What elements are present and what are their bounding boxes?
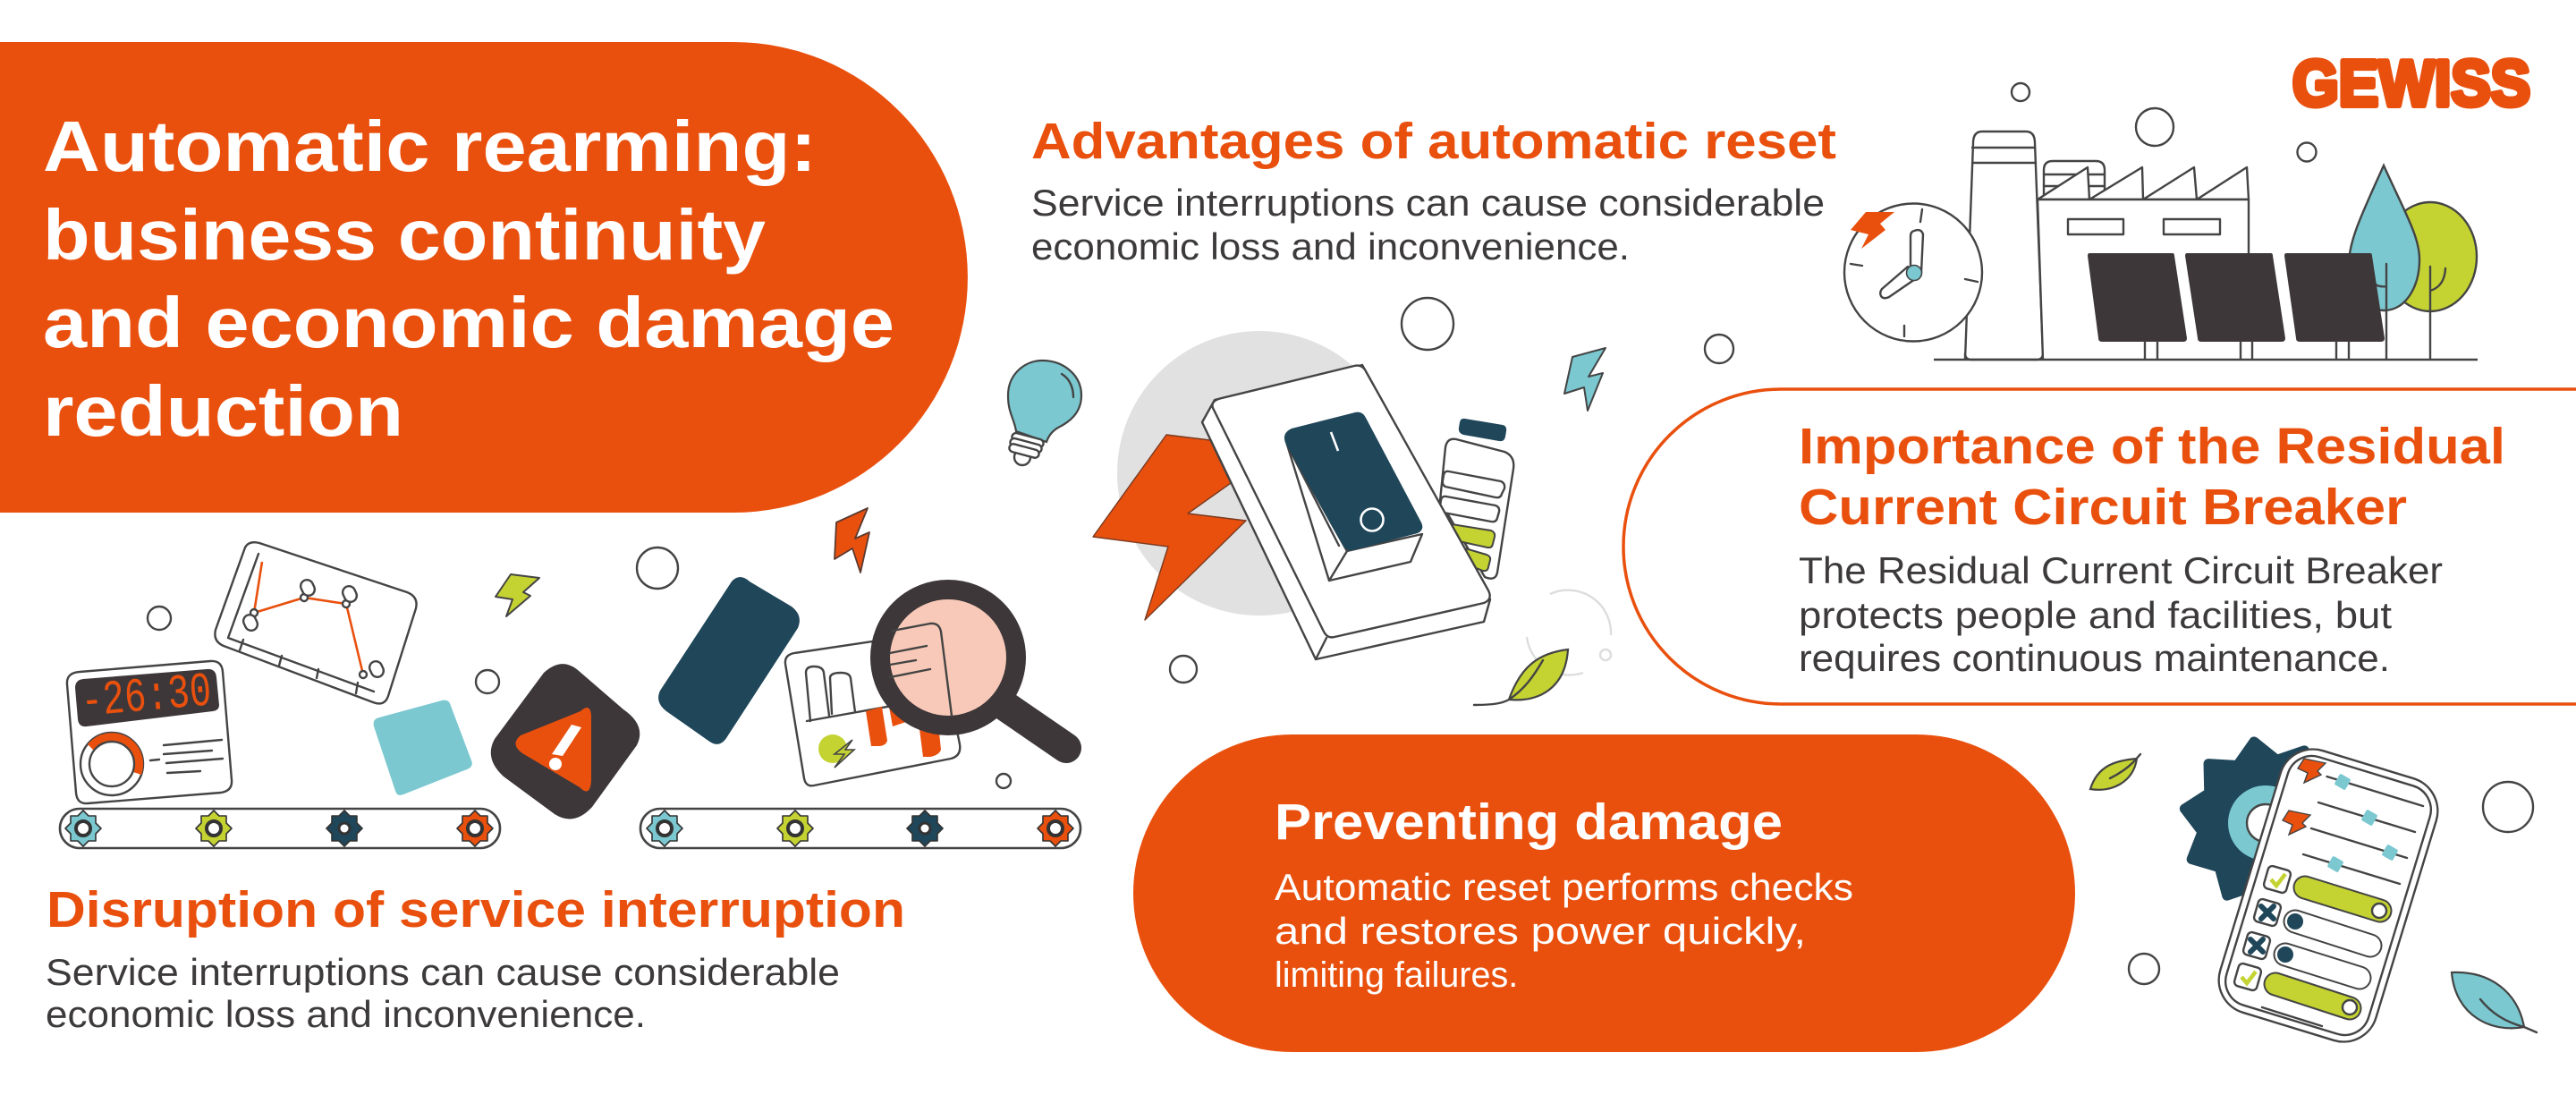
icon: teal bolt bbox=[1564, 348, 1606, 411]
icon: phone with controls bbox=[2210, 741, 2446, 1050]
text block: disruption of service interruption bbox=[46, 881, 905, 1035]
logo: GEWISS: GEWISS bbox=[2292, 48, 2530, 120]
panel: title bbox=[0, 42, 968, 513]
icon: magnifier bbox=[880, 590, 1066, 748]
title: Automatic rearming: bbox=[43, 106, 817, 186]
title bbox=[43, 106, 894, 451]
icon: switch with lightning and battery bbox=[1093, 331, 1513, 659]
panel: importance of the residual current circuit breaker: requires continuous maintenance. bbox=[1799, 637, 2390, 679]
text block: disruption of service interruption: economic loss and inconvenience. bbox=[46, 993, 646, 1035]
icon: lime bolt bbox=[496, 574, 539, 616]
panel: preventing damage bbox=[1133, 734, 2075, 1052]
text block: advantages of automatic reset: Advantages of automatic reset bbox=[1031, 113, 1836, 170]
switch plate bbox=[1202, 365, 1490, 659]
trees bbox=[2384, 202, 2477, 311]
solar panels bbox=[2088, 253, 2187, 342]
panel: preventing damage: Automatic reset performs checks bbox=[1275, 866, 1853, 908]
battery bbox=[1440, 419, 1513, 579]
text block: disruption of service interruption: Disruption of service interruption bbox=[47, 881, 905, 938]
text block: advantages of automatic reset: economic loss and inconvenience. bbox=[1031, 225, 1630, 267]
panel: preventing damage: limiting failures. bbox=[1275, 955, 1518, 995]
toggles bbox=[2275, 887, 2380, 1008]
icon: lime leaf bbox=[1474, 649, 1568, 705]
title: business continuity bbox=[43, 195, 767, 275]
icon: orange bolt bbox=[835, 508, 869, 573]
icon: timer device bbox=[67, 661, 232, 803]
decorative gray ring bbox=[1527, 590, 1611, 675]
text block: advantages of automatic reset: Service interruptions can cause considerable bbox=[1031, 182, 1825, 224]
icon: report under magnifier bbox=[785, 633, 960, 785]
building bbox=[2038, 167, 2249, 199]
conveyor belt: right bbox=[640, 809, 1080, 848]
panel: importance of the residual current circuit breaker: protects people and facilities, but bbox=[1799, 594, 2392, 636]
icon: warning sign bbox=[491, 664, 640, 819]
icon: small lime leaf bbox=[2090, 754, 2140, 790]
icon: navy tablet bbox=[658, 577, 800, 744]
icon: timer device: -26:30 bbox=[79, 665, 214, 731]
panel: importance of the residual current circuit breaker: Current Circuit Breaker bbox=[1799, 479, 2407, 536]
icon: teal square bbox=[374, 700, 472, 795]
panel: preventing damage: Preventing damage bbox=[1275, 794, 1783, 851]
conveyor belt: left bbox=[60, 809, 500, 848]
panel: importance of the residual current circuit breaker: The Residual Current Circuit Breaker bbox=[1799, 549, 2443, 591]
chimney bbox=[1965, 132, 2043, 360]
panel: importance of the residual current circuit breaker: Importance of the Residual bbox=[1799, 418, 2505, 475]
panel: preventing damage: and restores power quickly, bbox=[1275, 910, 1806, 952]
text block: advantages of automatic reset bbox=[1031, 113, 1836, 267]
icon: teal leaf bbox=[2452, 972, 2537, 1032]
title: and economic damage bbox=[43, 283, 894, 362]
decorative circles bbox=[148, 83, 2533, 984]
illustration: factory bbox=[1934, 132, 2478, 360]
icon: line chart tablet bbox=[215, 542, 417, 703]
icon: light bulb bbox=[1008, 361, 1081, 465]
title: reduction bbox=[43, 371, 403, 451]
back block bbox=[2044, 161, 2105, 199]
panel: importance of the residual current circuit breaker bbox=[1623, 389, 2576, 704]
icon: big gear bbox=[2171, 732, 2360, 914]
icon: clock bbox=[1844, 204, 1982, 342]
text block: disruption of service interruption: Service interruptions can cause considerable bbox=[46, 951, 840, 993]
